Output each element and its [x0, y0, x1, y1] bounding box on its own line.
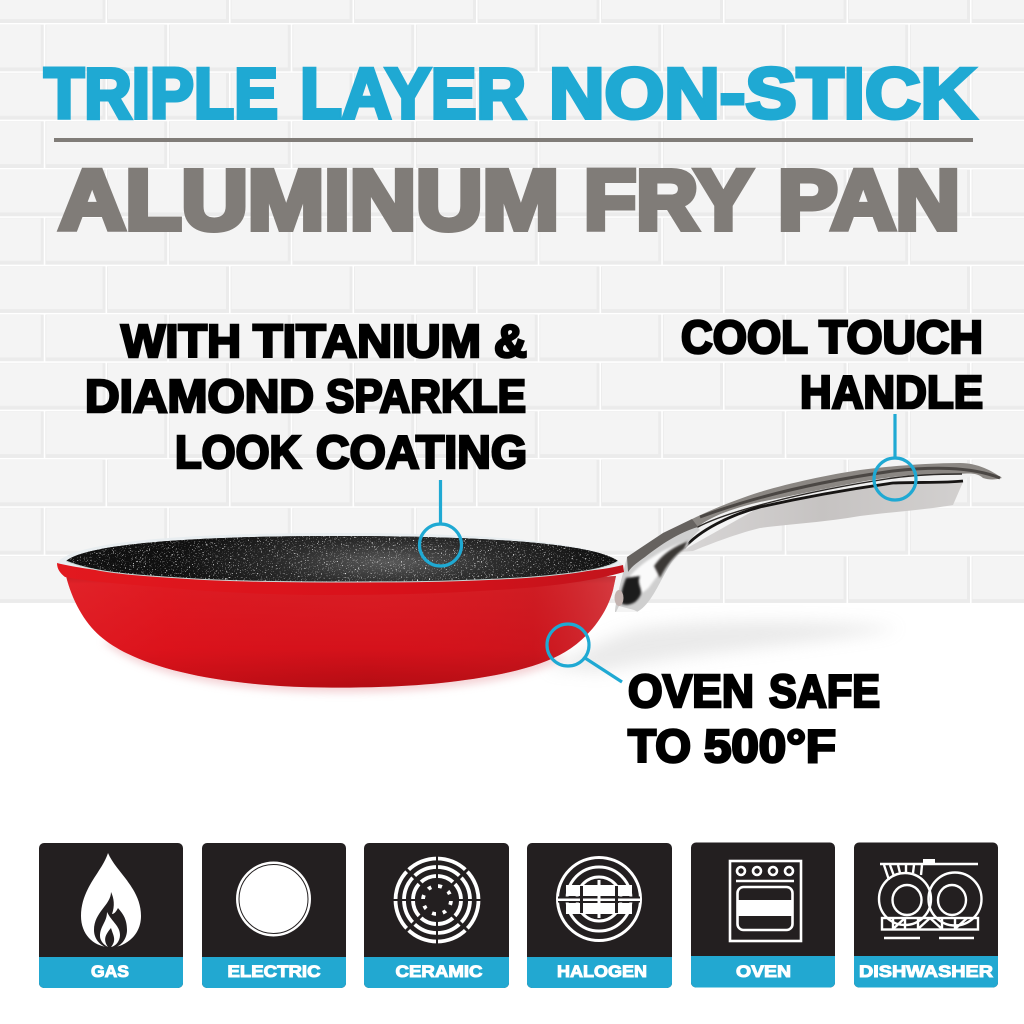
tile: ceramic: CERAMIC: [396, 962, 482, 981]
callout text: titanium and diamond coating: LOOK: [175, 426, 301, 478]
handle white highlight: [684, 463, 1002, 548]
callout text: cool touch handle: [681, 311, 983, 418]
handle: [614, 463, 1002, 612]
callout text: oven safe: 500°F: [704, 720, 836, 772]
red rim band: [57, 563, 624, 595]
tile: electric: ELECTRIC: [228, 962, 320, 981]
icon: flame: [81, 853, 141, 947]
handle flange: [680, 482, 963, 552]
title: triple layer non-stick: [44, 55, 976, 134]
tile: gas: GAS: [91, 962, 129, 981]
title divider: [54, 138, 973, 142]
pan rim: [57, 533, 624, 575]
title: triple layer non-stick: NON-STICK: [549, 55, 976, 134]
icon: dishwasher plates: [879, 859, 982, 938]
pan interior: non-stick coating: [66, 536, 618, 582]
callout text: titanium and diamond coating: DIAMOND: [85, 370, 314, 422]
tile: halogen: [527, 843, 672, 988]
tile: gas: [39, 843, 183, 988]
tile: electric: [202, 843, 346, 988]
icon: ceramic burner: [392, 855, 482, 945]
tile: ceramic: [364, 843, 509, 988]
cooktop compatibility icons: [39, 842, 998, 988]
tile: oven: [691, 842, 835, 988]
background: white brick wall: [0, 0, 1024, 604]
marker: coating: [420, 480, 462, 566]
countertop: [0, 604, 1024, 1024]
title: triple layer non-stick: TRIPLE: [44, 55, 278, 134]
handle upper grey band: [690, 463, 1002, 528]
icon: oven: [730, 861, 801, 941]
callout text: oven safe: TO: [628, 720, 691, 772]
marker: oven safe body: [547, 624, 622, 682]
callout text: titanium and diamond coating: WITH: [121, 315, 241, 367]
tile: dishwasher: DISHWASHER: [859, 962, 993, 981]
callout text: titanium and diamond coating: &: [494, 315, 527, 367]
subtitle: aluminum fry pan: ALUMINUM: [59, 153, 559, 247]
callout text: cool touch handle: COOL: [681, 311, 808, 363]
callout text: oven safe: [628, 665, 880, 772]
callout text: cool touch handle: TOUCH: [819, 311, 983, 363]
title: triple layer non-stick: LAYER: [300, 55, 526, 134]
icon: electric burner: [236, 862, 311, 936]
marker: handle: [874, 414, 916, 500]
pan shadow: [102, 621, 900, 693]
silver lip line: [66, 561, 618, 582]
callout text: titanium and diamond coating: [85, 315, 527, 478]
callout text: oven safe: SAFE: [769, 665, 880, 717]
callout text: titanium and diamond coating: TITANIUM: [253, 315, 481, 367]
callout text: oven safe: OVEN: [628, 665, 754, 717]
icon: halogen burner: [558, 858, 640, 940]
callout text: titanium and diamond coating: SPARKLE: [326, 370, 526, 422]
callout text: titanium and diamond coating: COATING: [316, 426, 527, 478]
tile: dishwasher: [854, 842, 998, 988]
callout text: cool touch handle: HANDLE: [800, 366, 983, 418]
pan body: [66, 576, 616, 688]
subtitle: aluminum fry pan: FRY: [584, 153, 752, 247]
subtitle: aluminum fry pan: PAN: [778, 153, 960, 247]
handle neck: [615, 519, 700, 612]
product photo: red fry pan: [57, 463, 1002, 693]
tile: oven: OVEN: [736, 962, 791, 981]
subtitle: aluminum fry pan: [59, 153, 960, 247]
tile: halogen: HALOGEN: [557, 962, 647, 981]
handle dark stripes: [684, 468, 1000, 548]
rivet: [614, 590, 624, 606]
